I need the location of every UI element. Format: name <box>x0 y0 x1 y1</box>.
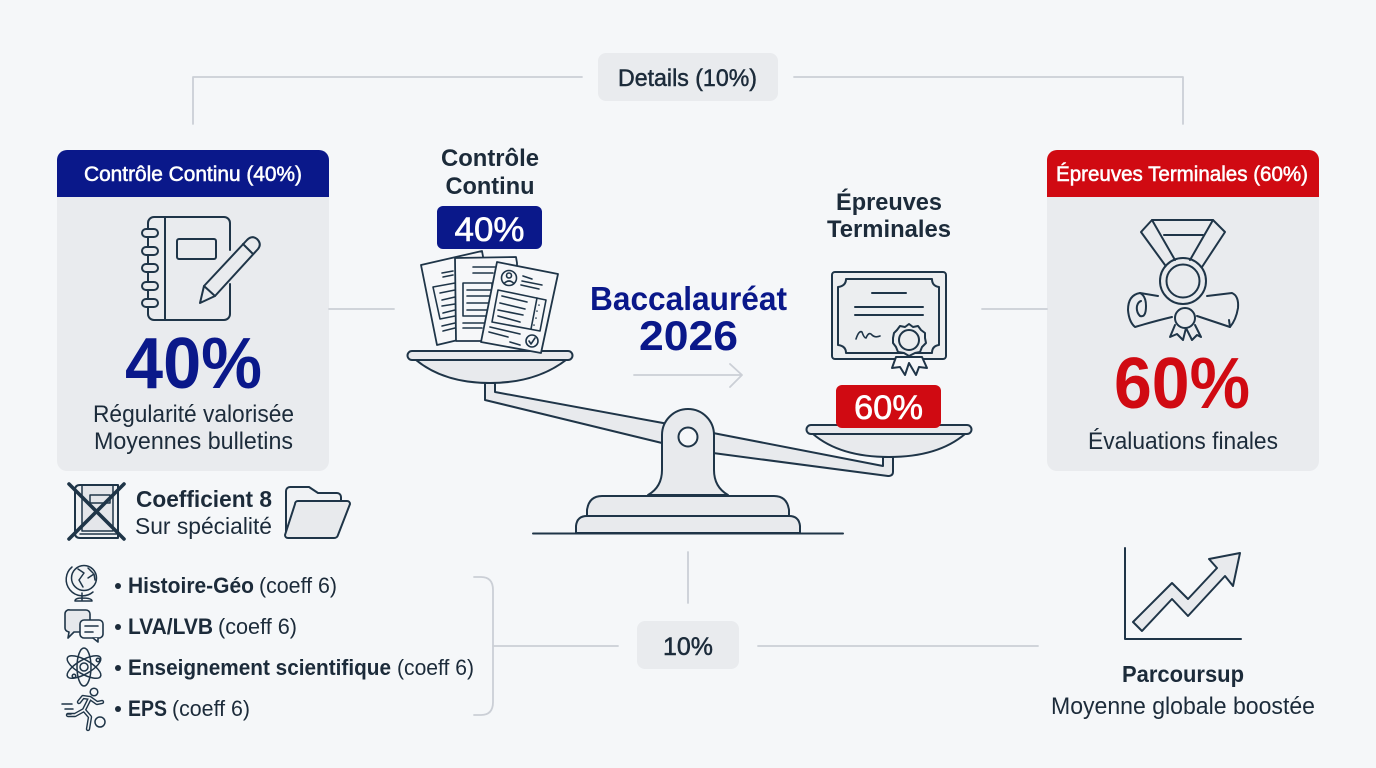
parcoursup text: Parcoursup <box>1122 661 1244 687</box>
title: baccalauréat 2026: Baccalauréat <box>590 280 787 317</box>
pivot pin <box>678 428 698 446</box>
description: épreuves terminales: Évaluations finales <box>1088 428 1278 455</box>
icon: globe <box>66 566 96 601</box>
title: baccalauréat 2026: 2026 <box>639 312 738 359</box>
icon: speech bubbles <box>65 610 103 642</box>
scale pivot post <box>648 409 728 495</box>
panel heading: épreuves terminales: Épreuves Terminales (60%) <box>1056 163 1308 186</box>
parcoursup text <box>1051 661 1315 720</box>
details badge <box>598 53 778 101</box>
scale base <box>533 496 843 534</box>
description: contrôle continu <box>93 401 294 455</box>
side connectors <box>329 308 1047 310</box>
big figure 40%: 40% <box>125 324 262 404</box>
item: eps: EPS <box>128 696 167 721</box>
item: eps: (coeff 6) <box>172 696 250 721</box>
panel: épreuves terminales <box>1047 150 1319 471</box>
label: épreuves terminales: Épreuves <box>836 188 942 216</box>
description: contrôle continu: Moyennes bulletins <box>94 428 293 455</box>
left pan <box>408 351 572 383</box>
scale <box>408 351 972 534</box>
item: lva/lvb: (coeff 6) <box>218 614 297 639</box>
40% badge: 40% <box>454 211 524 249</box>
subject list <box>62 566 474 729</box>
item: enseignement scientifique: (coeff 6) <box>397 655 474 680</box>
bottom connectors <box>474 552 1038 715</box>
icon: certificate with rosette <box>832 272 946 375</box>
item: histoire-géo: (coeff 6) <box>259 573 337 598</box>
parcoursup block <box>1051 548 1315 720</box>
coefficient text: Sur spécialité <box>135 513 272 539</box>
item: lva/lvb: LVA/LVB <box>128 614 213 639</box>
label: contrôle continu: Contrôle <box>441 145 539 172</box>
item: histoire-géo: Histoire-Géo <box>128 573 254 598</box>
panel: contrôle continu <box>57 150 329 471</box>
top connector bracket <box>193 77 1183 124</box>
coefficient text <box>135 486 272 539</box>
10% badge <box>637 621 739 669</box>
big figure 60%: 60% <box>1114 344 1250 424</box>
label: contrôle continu: Continu <box>446 173 534 200</box>
description: contrôle continu: Régularité valorisée <box>93 401 294 428</box>
coefficient 8 block <box>69 484 350 539</box>
item: histoire-géo <box>115 573 337 598</box>
label: épreuves terminales: Terminales <box>827 216 951 243</box>
10% badge: 10% <box>663 633 713 661</box>
icon: stack of documents <box>421 251 558 353</box>
60% badge: 60% <box>854 389 923 427</box>
right pan <box>806 425 972 457</box>
panel heading: contrôle continu: Contrôle Continu (40%) <box>84 163 302 186</box>
scale beam <box>485 383 893 476</box>
item: eps <box>115 696 250 721</box>
coefficient text: Coefficient 8 <box>136 486 272 512</box>
icon: rising trend chart <box>1125 548 1241 639</box>
icon: crossed out book <box>69 484 124 539</box>
icon: folder <box>285 487 350 538</box>
icon: runner with ball <box>62 688 105 729</box>
40% badge <box>437 206 542 249</box>
details badge: Details (10%) <box>618 65 757 92</box>
item: lva/lvb <box>115 614 297 639</box>
icon: notebook and pencil <box>142 217 260 320</box>
label: épreuves terminales <box>827 188 951 243</box>
icon: atom <box>64 648 104 686</box>
label: contrôle continu <box>441 145 539 200</box>
title: baccalauréat 2026 <box>590 280 787 359</box>
parcoursup text: Moyenne globale boostée <box>1051 693 1315 720</box>
item: enseignement scientifique: Enseignement scientifique <box>128 655 391 680</box>
arrow <box>634 364 742 387</box>
60% badge <box>836 385 941 428</box>
icon: medal and diploma <box>1128 220 1238 340</box>
